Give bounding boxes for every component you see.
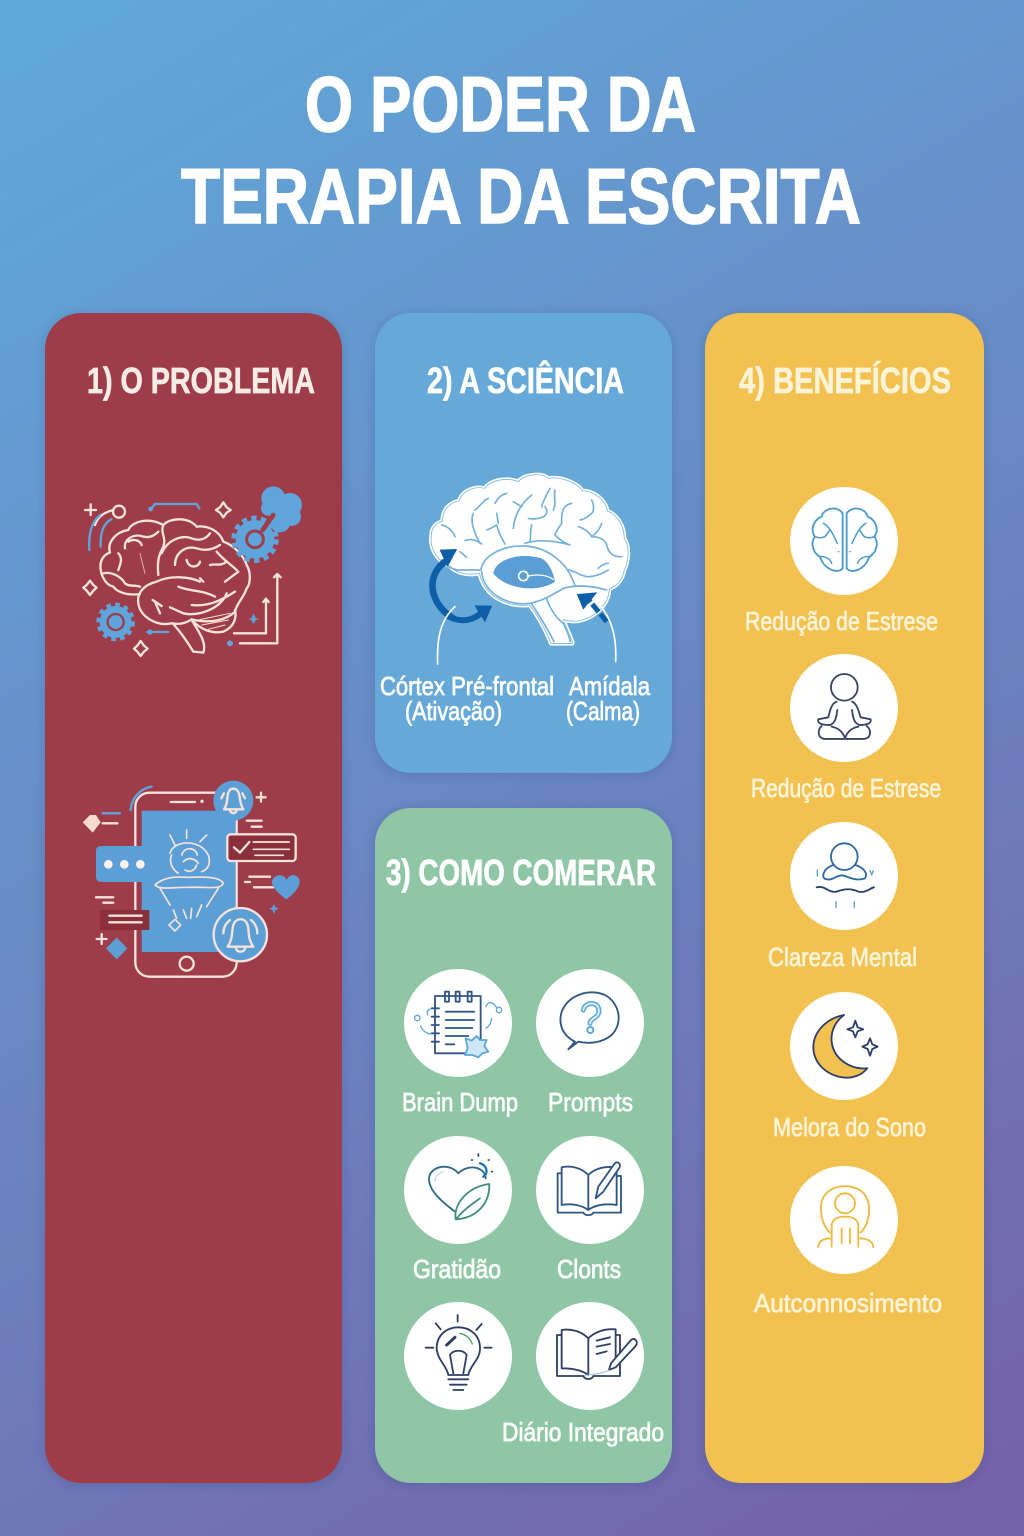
item: brain dump: Brain Dump <box>402 1087 518 1117</box>
item: melhora do sono: Melora do Sono <box>773 1112 926 1142</box>
item: clareza mental: Clareza Mental <box>768 942 917 972</box>
icon: brain with arrows <box>432 476 627 664</box>
item: clonts <box>536 1136 644 1284</box>
item: redução de estresse 1: Redução de Estrese <box>745 606 938 636</box>
item: melhora do sono <box>773 992 926 1142</box>
heading: benefícios: 4) BENEFÍCIOS <box>739 360 951 401</box>
label: amídala <box>566 671 650 726</box>
item: diário integrado: Diário Integrado <box>502 1417 664 1447</box>
title <box>181 60 861 240</box>
item: gratidão <box>404 1136 512 1284</box>
item: redução de estresse 2: Redução de Estrese <box>751 773 941 803</box>
icon: brain with gears <box>83 486 302 656</box>
item: clonts: Clonts <box>557 1254 621 1284</box>
title: TERAPIA DA ESCRITA <box>181 152 861 240</box>
heading: como comerar: 3) COMO COMERAR <box>386 852 656 893</box>
item: prompts: Prompts <box>548 1087 633 1117</box>
label: amídala: Amídala <box>569 671 650 701</box>
item: clareza mental <box>768 822 917 972</box>
icon: phone with notifications <box>83 781 300 977</box>
title: O PODER DA <box>305 60 696 148</box>
item: brain dump <box>402 969 518 1117</box>
label: amídala: (Calma) <box>566 696 640 726</box>
label: córtex pré-frontal: Córtex Pré-frontal <box>380 671 554 701</box>
item: redução de estresse 2 <box>751 654 941 803</box>
panel: 2) a ciência <box>375 313 672 773</box>
label: córtex pré-frontal <box>380 671 554 726</box>
heading: o problema: 1) O PROBLEMA <box>87 360 315 401</box>
item: diário integrado <box>502 1302 664 1447</box>
panel: 1) o problema <box>45 313 342 1483</box>
panel: 3) como começar <box>375 808 672 1483</box>
item: prompts <box>536 969 644 1117</box>
item: gratidão: Gratidão <box>413 1254 501 1284</box>
item: autoconhecimento <box>754 1166 942 1318</box>
item: lightbulb <box>404 1302 512 1410</box>
item: autoconhecimento: Autconnosimento <box>754 1288 942 1318</box>
item: redução de estresse 1 <box>745 487 938 636</box>
label: córtex pré-frontal: (Ativação) <box>405 696 502 726</box>
heading: a ciência: 2) A SCIÊNCIA <box>427 359 624 401</box>
panel: 4) benefícios <box>705 313 984 1483</box>
